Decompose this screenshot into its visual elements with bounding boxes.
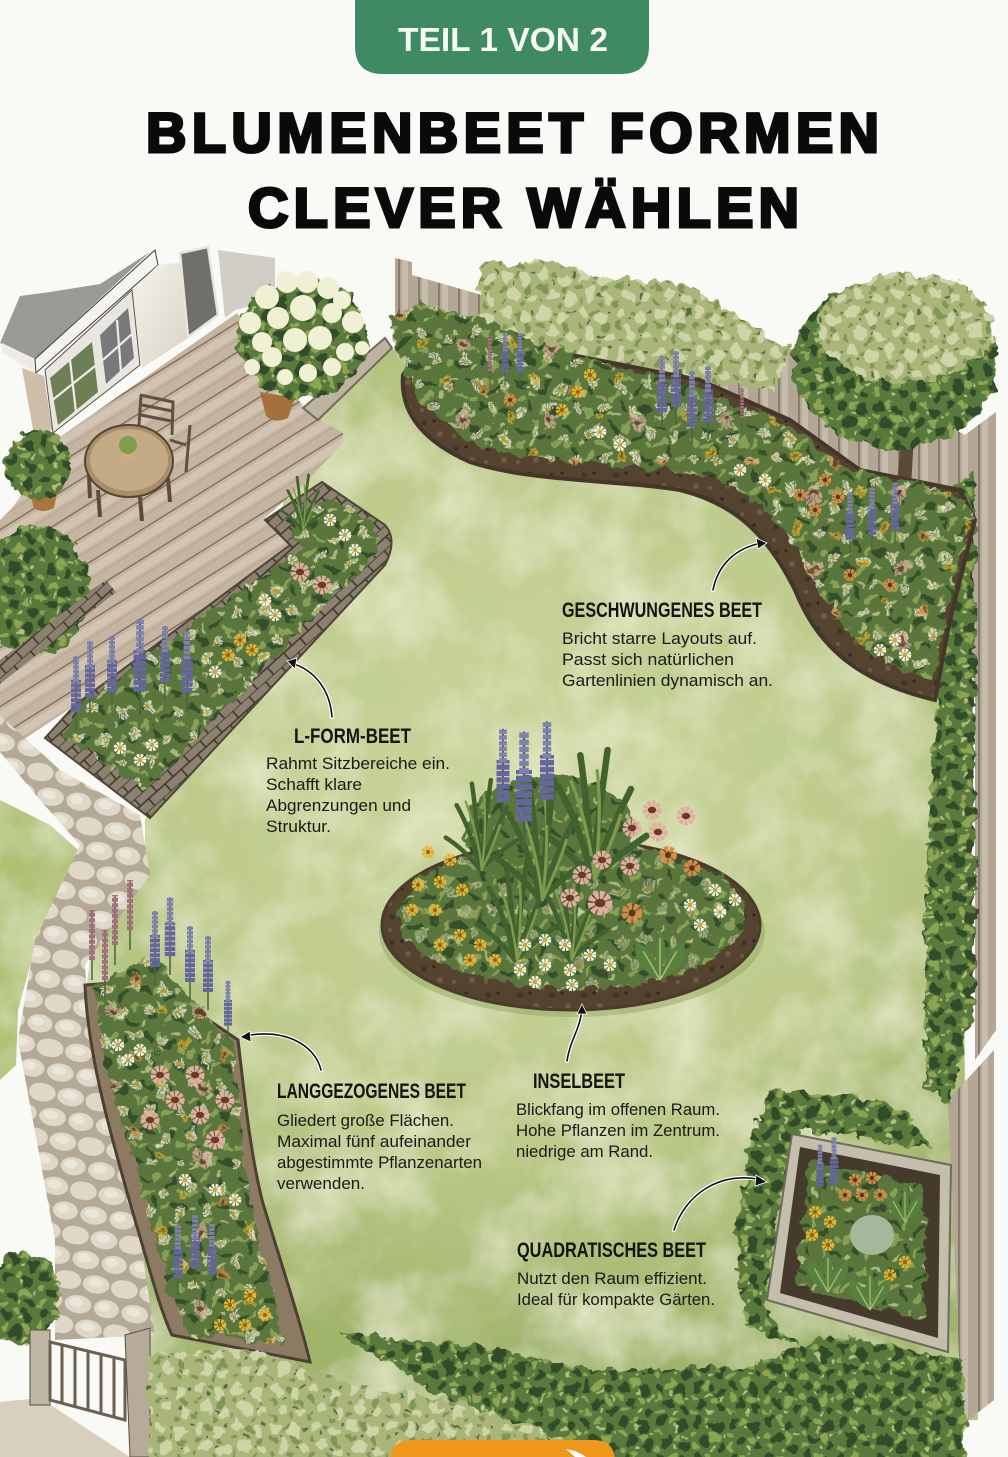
shadow [379,849,765,1017]
soil [403,320,975,700]
pale hedge [148,1348,640,1457]
door [180,247,218,337]
back fence [715,340,975,510]
badge: part 1 of 2: TEIL 1 VON 2 [398,21,608,58]
bed plants [64,498,379,792]
stone wall [303,338,392,420]
body: Nutzt den Raum effizient. [517,1270,707,1288]
chair [139,395,190,472]
top left fence [395,258,482,340]
white flowers [516,886,739,989]
tall spikes [92,880,228,1295]
arrow [567,1004,587,1061]
panel: island bed [379,721,765,1017]
title [146,101,879,239]
panel: back fence, hedge and tree [395,258,997,1425]
body: verwenden. [277,1175,365,1193]
heading: QUADRATISCHES BEET [517,1239,706,1262]
lawn [85,340,978,1430]
table plant [120,448,137,460]
lavender and pink spikes [490,333,895,555]
body: Bricht starre Layouts auf. [562,630,757,648]
panel: bottom hedge [148,1335,965,1457]
right fence [958,412,996,1060]
body: Maximal fünf aufeinander [277,1133,472,1151]
gate [30,1328,150,1457]
heading: LANGGEZOGENES BEET [277,1080,466,1103]
flowers [114,1041,269,1329]
potted plant [5,431,71,511]
bed plants [95,955,285,1345]
broad leaves [635,929,685,980]
lawn left of the path [0,800,78,1080]
window [45,290,140,433]
body [562,630,773,690]
callout: long bed [240,1031,482,1193]
body: niedrige am Rand. [516,1143,653,1161]
soil [780,1147,940,1338]
right hedge [925,470,975,1105]
plants [795,1137,925,1320]
flowers [506,371,909,659]
house roof [0,250,158,373]
callout: L-form bed [266,658,450,836]
body [516,1101,720,1161]
flowers [116,475,359,764]
body: Ideal für kompakte Gärten. [517,1291,715,1309]
arrow [287,658,332,717]
heading: GESCHWUNGENES BEET [562,599,762,622]
body: Struktur. [266,818,331,836]
arrow [240,1031,321,1070]
panel: entrance shrub and gate [0,1252,150,1457]
central grass tufts [446,750,647,960]
top hedge [478,262,790,390]
heading: L-FORM-BEET [294,725,411,748]
lavender [76,619,187,730]
body: Passt sich natürlichen [562,651,734,669]
stone frame [767,1134,951,1352]
panel: L-form bed [45,475,392,818]
dark hedge [340,1335,965,1457]
panel: terrace and house [0,247,392,745]
soil [85,980,310,1362]
body [517,1270,715,1309]
hydrangea [236,271,369,421]
title: BLUMENBEET FORMEN [146,101,879,164]
body: abgestimmte Pflanzenarten [277,1154,482,1172]
callout: square bed [517,1175,767,1309]
coneflowers [564,804,697,919]
orange button with arrow [390,1440,615,1457]
body: Abgrenzungen und [266,797,411,815]
body: Rahmt Sitzbereiche ein. [266,755,450,773]
edging and soil [382,840,760,1010]
arrow [674,1175,767,1230]
wooden deck [0,313,343,745]
body [266,755,450,836]
body: Schafft klare [266,776,362,794]
heading: INSELBEET [533,1070,625,1093]
callout: curved bed [562,538,773,690]
shrub [0,1252,60,1344]
panel: long bed [85,880,310,1362]
panel: square bed [735,1090,951,1352]
body: Gliedert große Flächen. [277,1112,454,1130]
body: Hohe Pflanzen im Zentrum. [516,1122,720,1140]
brick edging [45,482,392,818]
body: Blickfang im offenen Raum. [516,1101,720,1119]
arrow [713,538,767,590]
yellow flowers [408,848,499,964]
tree trunk [870,385,938,505]
badge: part 1 of 2 [355,0,649,74]
tree crown [793,273,997,448]
panel: stone path [0,715,155,1340]
paved entrance [0,1398,130,1457]
body [277,1112,482,1193]
title: CLEVER WÄHLEN [248,176,799,239]
table [85,425,173,521]
callout: island bed [516,1004,720,1161]
panel: curved bed [390,300,975,700]
bed plants [390,300,975,680]
shrub and low wall [0,525,116,684]
surrounding hedge [735,1090,935,1345]
lavender spikes [503,721,547,850]
house wall [132,262,188,368]
lower right fence [948,1050,994,1425]
bed plants [398,775,746,989]
body: Gartenlinien dynamisch an. [562,672,773,690]
